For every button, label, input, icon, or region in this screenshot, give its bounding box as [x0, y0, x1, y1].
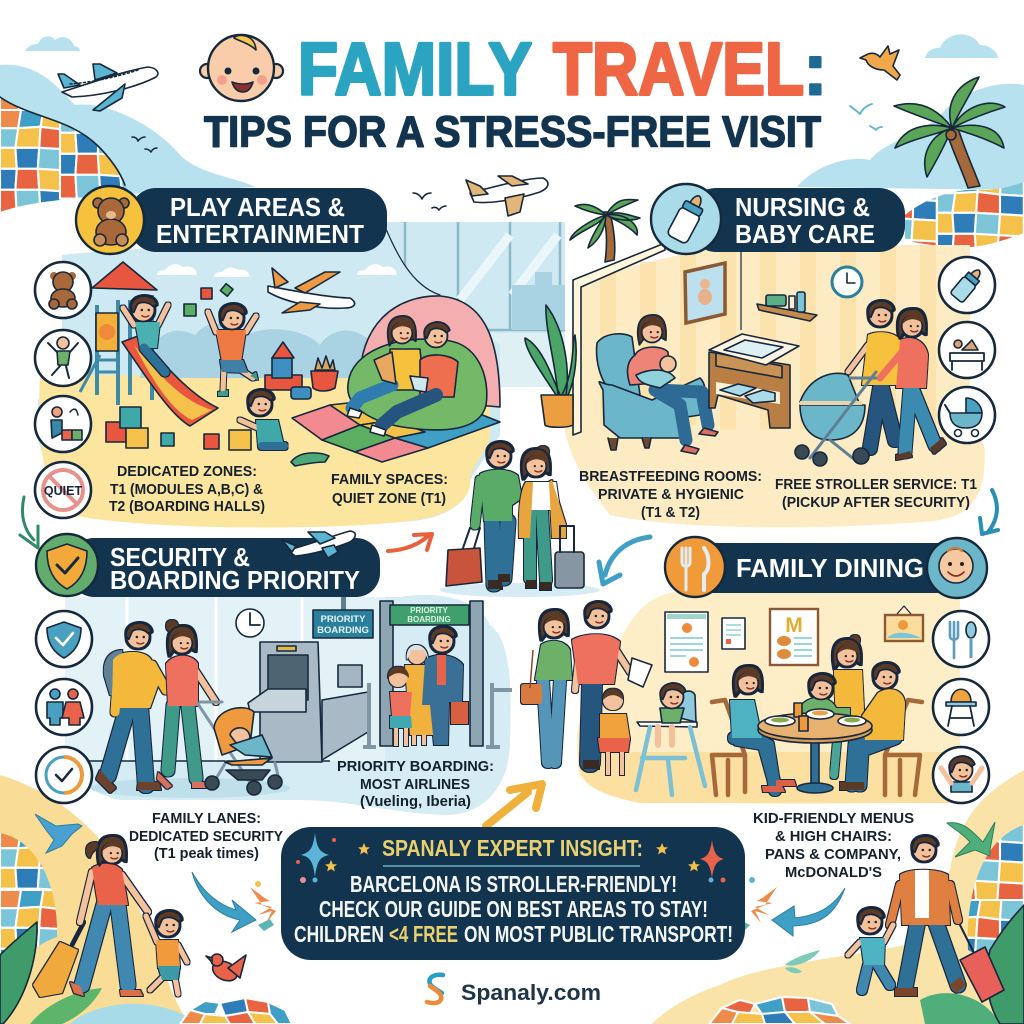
picture frame	[685, 263, 725, 323]
burger poster: M	[785, 614, 803, 637]
icon column: play	[35, 262, 91, 518]
label: dedicated zones: T1 (MODULES A,B,C) &	[110, 481, 263, 498]
small notice	[722, 618, 745, 649]
section header: security: SECURITY &	[110, 542, 250, 572]
section header: nursing: NURSING &	[735, 192, 870, 222]
high chair with baby	[636, 683, 705, 795]
child jumping	[208, 304, 258, 396]
icon column: nursing	[939, 257, 995, 443]
icon column: security	[36, 611, 92, 803]
label: family lanes: FAMILY LANES:	[152, 810, 261, 827]
father with backpack	[96, 623, 166, 793]
label: family spaces	[331, 471, 448, 507]
small birds left	[132, 137, 446, 210]
priority boarding sign: BOARDING	[317, 625, 369, 636]
priority boarding sign	[313, 597, 373, 638]
panel: play areas	[38, 222, 500, 527]
label: dedicated zones: T2 (BOARDING HALLS)	[109, 498, 265, 515]
title: FAMILY	[298, 28, 532, 110]
label: breastfeeding rooms: BREASTFEEDING ROOMS:	[579, 468, 762, 485]
mosaic outline	[0, 97, 125, 185]
label: priority boarding	[337, 758, 494, 810]
section header: nursing: BABY CARE	[735, 219, 875, 249]
label: free stroller service	[775, 476, 977, 511]
play panel background	[38, 222, 500, 527]
plane toy	[268, 268, 355, 313]
bottom left traveller	[33, 836, 148, 997]
security background	[65, 595, 511, 815]
mosaic: bottom centre	[180, 998, 292, 1024]
icon: shield	[47, 544, 87, 589]
bottom left child	[146, 911, 187, 994]
armchair with mother and baby	[597, 315, 718, 454]
security scanner	[248, 642, 368, 762]
section header: play areas	[76, 186, 387, 254]
small leaves	[785, 950, 820, 973]
panel: nursing	[525, 199, 985, 527]
gate with priority family	[363, 601, 512, 747]
potted plant	[525, 305, 576, 427]
panel: security	[65, 595, 512, 815]
section header: nursing	[651, 184, 905, 254]
mosaic: bottom right centre	[709, 997, 850, 1024]
callout: expert insight: ON MOST PUBLIC TRANSPORT!	[464, 921, 733, 947]
label: kid-friendly menus: PANS & COMPANY,	[765, 846, 901, 863]
icon: blue bird	[35, 814, 82, 853]
wall clock	[832, 267, 862, 297]
label: priority boarding: PRIORITY BOARDING:	[337, 758, 494, 775]
arrow: blue to family	[599, 537, 650, 584]
couple pushing stroller	[848, 301, 946, 460]
callout: expert insight: CHECK OUR GUIDE ON BEST AREAS TO STAY!	[319, 896, 708, 922]
label: family lanes: (T1 peak times)	[154, 845, 259, 862]
icon: palm tree top right	[894, 77, 1005, 188]
changing table	[709, 334, 799, 428]
priority boarding sign: PRIORITY	[321, 614, 366, 625]
callout: expert insight: SPANALY EXPERT INSIGHT:	[382, 835, 643, 861]
toy cubes floating	[184, 284, 233, 316]
icon column: dining	[933, 611, 989, 803]
icon: baby head	[939, 548, 973, 583]
mosaic: bottom right	[968, 825, 1024, 954]
leaves bottom right	[920, 905, 1024, 1024]
mother with stroller	[157, 620, 216, 789]
beanbag with parents	[347, 316, 487, 436]
airport window background	[383, 222, 565, 387]
icon: plane on header	[282, 531, 355, 558]
toy dinosaur	[291, 453, 329, 466]
section header: security	[36, 531, 380, 597]
icon: child with blocks	[35, 396, 91, 452]
blocks pile	[106, 407, 251, 450]
leaves bottom left	[0, 922, 102, 1024]
icon: blue shield	[36, 611, 92, 667]
icon: baby bottle	[666, 191, 709, 244]
gate with priority family: BOARDING	[407, 615, 451, 624]
icon: quiet	[35, 462, 91, 518]
cloud top left	[25, 36, 80, 51]
mother in yellow jacket	[519, 446, 566, 590]
callout: expert insight: CHILDREN	[294, 921, 384, 947]
grey suitcase	[555, 526, 584, 588]
playground slide	[80, 262, 218, 426]
blue pram	[795, 372, 876, 466]
gate with priority family: PRIORITY	[410, 606, 449, 615]
label: priority boarding: MOST AIRLINES	[360, 776, 470, 793]
section header: security: BOARDING PRIORITY	[110, 565, 360, 595]
dining background	[577, 590, 960, 804]
burger poster	[770, 609, 818, 665]
framed picture	[885, 606, 923, 641]
label: breastfeeding rooms: PRIVATE & HYGIENIC	[598, 486, 744, 503]
red suitcase	[446, 528, 482, 586]
mosaic: top left	[0, 98, 127, 212]
family at menu	[521, 602, 652, 775]
arrow: play to security	[20, 497, 38, 548]
block tower	[265, 342, 338, 399]
icon: bottle	[939, 257, 995, 313]
centre family with suitcases	[440, 442, 600, 597]
icon: cutlery	[933, 611, 989, 667]
label: family lanes: DEDICATED SECURITY	[129, 828, 283, 845]
orange stroller with baby	[198, 702, 282, 795]
label: dedicated zones: DEDICATED ZONES:	[117, 463, 257, 480]
icon: plane centre	[466, 176, 548, 216]
mosaic: bottom left	[0, 833, 58, 954]
icon: teddy bear	[93, 198, 129, 246]
icon: red bird	[206, 954, 246, 985]
arrow: orange	[388, 534, 432, 551]
arrow: yellow upward	[486, 784, 542, 826]
arrow: dining to insight	[772, 888, 845, 936]
label: breastfeeding rooms: (T1 & T2)	[641, 504, 700, 521]
icon: teddy	[35, 262, 91, 318]
icon: happy child	[933, 747, 989, 803]
icon: baby face	[200, 35, 283, 101]
label: priority boarding: (Vueling, Iberia)	[360, 793, 471, 810]
child with blocks	[240, 390, 284, 446]
cloud top right	[925, 34, 998, 58]
label: kid-friendly menus: KID-FRIENDLY MENUS	[753, 810, 914, 827]
dining table family	[712, 635, 922, 795]
label: kid-friendly menus: & HIGH CHAIRS:	[775, 828, 892, 845]
menu poster	[665, 612, 708, 672]
nursing room background	[565, 243, 985, 527]
icon: quiet: QUIET	[44, 484, 82, 498]
foam play mat	[292, 400, 500, 462]
icon: pram	[939, 387, 995, 443]
icon: green bird	[947, 822, 995, 857]
section header: dining	[665, 537, 987, 598]
label: family lanes	[129, 810, 283, 862]
child on slide	[123, 296, 168, 372]
logo: Spanaly.com	[427, 975, 601, 1005]
label: free stroller service: (PICKUP AFTER SECURITY)	[782, 494, 970, 511]
label: family spaces: QUIET ZONE (T1)	[332, 490, 446, 507]
label: family spaces: FAMILY SPACES:	[331, 471, 448, 488]
arrow: family lanes to insight	[192, 872, 256, 932]
icon: family	[36, 679, 92, 735]
label: breastfeeding rooms	[579, 468, 762, 521]
title: TIPS FOR A STRESS-FREE VISIT	[204, 108, 821, 156]
pink quiet dome	[360, 296, 500, 407]
section header: play areas: PLAY AREAS &	[170, 192, 345, 222]
icon: fork and knife	[682, 548, 708, 590]
icon: clock	[36, 747, 92, 803]
title: :	[803, 28, 828, 110]
title: TRAVEL	[553, 28, 804, 110]
wall shelf	[757, 292, 817, 321]
title	[204, 28, 828, 156]
panel: dining	[521, 590, 960, 804]
palm in window	[570, 199, 640, 262]
label: kid-friendly menus: McDONALD'S	[785, 864, 882, 881]
icon: plane top left	[58, 64, 158, 111]
label: dedicated zones	[109, 463, 265, 515]
callout: expert insight	[250, 827, 777, 960]
logo: Spanaly.com: Spanaly.com	[461, 980, 601, 1005]
icon: baby changing	[939, 322, 995, 378]
section header: dining: FAMILY DINING	[736, 553, 924, 583]
icon: orange bird	[860, 46, 900, 80]
label: free stroller service: FREE STROLLER SERVICE: T1	[775, 476, 977, 493]
section header: play areas: ENTERTAINMENT	[156, 219, 364, 249]
arrow: blue to dining	[980, 490, 998, 534]
wall clock	[236, 609, 264, 637]
mosaic: top right	[905, 182, 1024, 247]
icon: high chair	[933, 679, 989, 735]
callout: expert insight: BARCELONA IS STROLLER-FRIENDLY!	[350, 871, 677, 897]
small birds	[850, 104, 882, 130]
icon: running child	[35, 330, 91, 386]
father in green	[475, 442, 523, 589]
callout: expert insight: <4 FREE	[389, 921, 458, 947]
bottom right traveller	[848, 836, 1004, 1002]
label: kid-friendly menus	[753, 810, 914, 881]
